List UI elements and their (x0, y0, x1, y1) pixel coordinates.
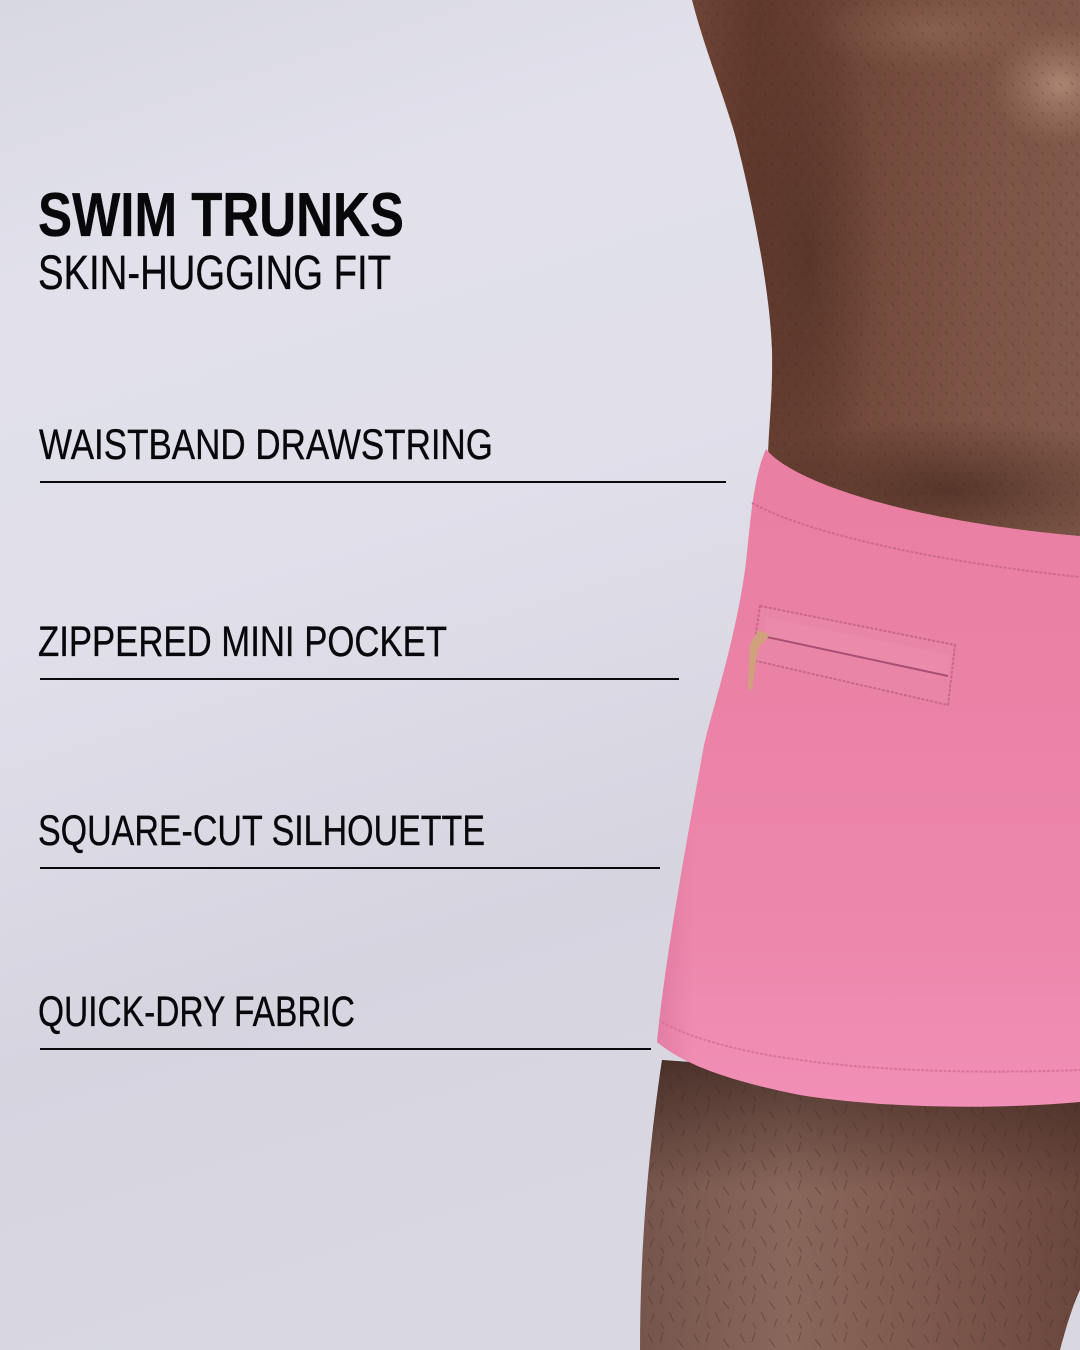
feature: waistband drawstring: WAISTBAND DRAWSTRING (39, 421, 493, 469)
feature: square-cut silhouette: SQUARE-CUT SILHOUETTE (38, 807, 485, 855)
waistband stitching (752, 503, 1080, 577)
photo: pink swim trunks (657, 449, 1080, 1107)
subtitle: SKIN-HUGGING FIT (38, 247, 391, 300)
zippered mini pocket (748, 606, 955, 705)
feature: quick-dry fabric: QUICK-DRY FABRIC (38, 988, 355, 1036)
title: SWIM TRUNKS (38, 181, 404, 250)
photo: model torso (692, 0, 1080, 536)
photo: model leg (630, 1050, 1080, 1350)
feature: zippered mini pocket: ZIPPERED MINI POCKET (38, 618, 447, 666)
hem stitching (662, 1022, 1080, 1072)
